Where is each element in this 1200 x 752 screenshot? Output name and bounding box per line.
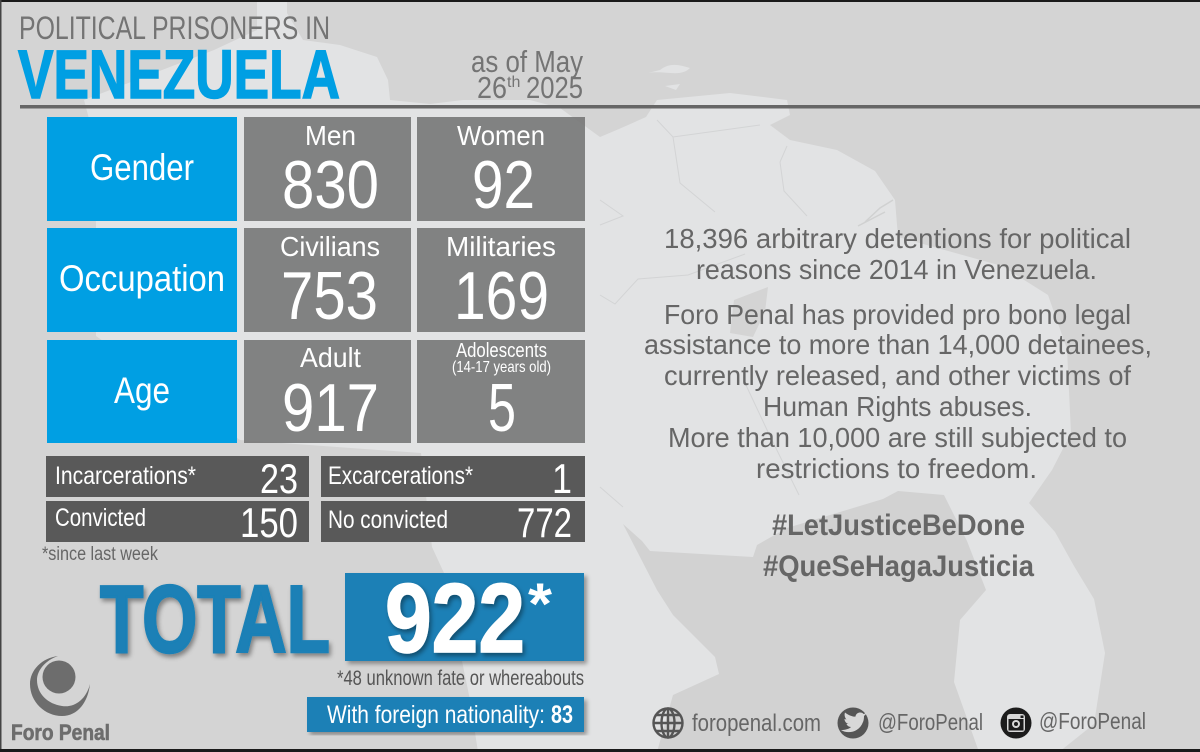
date: 2025 — [526, 70, 583, 105]
total value — [345, 563, 584, 673]
icon: twitter — [838, 708, 868, 738]
stat: no convicted: No convicted — [328, 506, 448, 534]
text block: legal assistance: currently released, and other victims of — [664, 360, 1131, 391]
stat: excarcerations — [321, 455, 585, 502]
hashtags: #QueSeHagaJusticia — [763, 550, 1034, 583]
date: as of May — [471, 44, 583, 79]
logo: Foro Penal — [11, 656, 110, 745]
title — [18, 10, 340, 113]
panel: occupation: Civilians — [280, 231, 380, 262]
footnote: unknown fate: *48 unknown fate or whereabouts — [337, 667, 584, 690]
date — [471, 44, 583, 105]
stat: excarcerations: Excarcerations* — [328, 462, 473, 490]
text block: legal assistance — [644, 299, 1152, 484]
panel: age: Adolescents — [456, 340, 547, 362]
panel: gender: Men — [305, 120, 356, 151]
panel: age: (14-17 years old) — [452, 359, 551, 376]
stat: convicted: Convicted — [55, 504, 146, 532]
panel: gender — [47, 117, 585, 223]
logo: Foro Penal: Foro Penal — [11, 720, 110, 745]
text block: legal assistance: Human Rights abuses. — [763, 391, 1032, 422]
title: POLITICAL PRISONERS IN — [19, 10, 330, 46]
foreign nationality callout: 83 — [551, 701, 573, 729]
stat: no convicted — [321, 499, 585, 546]
text block: legal assistance: restrictions to freedom. — [756, 453, 1037, 484]
panel: occupation: 753 — [281, 258, 378, 334]
icon: instagram — [1000, 708, 1032, 738]
text block: legal assistance: Foro Penal has provided pro bono legal — [664, 299, 1131, 330]
text block: arbitrary detentions: 18,396 arbitrary detentions for political — [664, 223, 1131, 254]
total label: TOTAL — [100, 566, 330, 673]
panel: gender: 92 — [472, 147, 535, 223]
stat: incarcerations: 23 — [260, 455, 298, 502]
stat: convicted: 150 — [240, 499, 298, 546]
stat: no convicted: 772 — [517, 499, 572, 546]
panel: occupation: Militaries — [446, 231, 556, 262]
hashtags — [763, 509, 1034, 583]
panel: occupation: 169 — [454, 258, 549, 334]
panel: gender: Gender — [90, 147, 194, 188]
panel: age: 5 — [488, 370, 516, 446]
panel: gender: Women — [457, 120, 545, 151]
total value: * — [528, 572, 552, 637]
total value: 922 — [385, 563, 525, 673]
text: twitter handle: @ForoPenal — [878, 709, 983, 735]
stat: incarcerations — [46, 455, 309, 502]
date: th — [507, 74, 520, 91]
text: website: foropenal.com — [692, 710, 821, 737]
foreign nationality callout: With foreign nationality: — [327, 701, 545, 729]
title: VENEZUELA — [18, 36, 340, 113]
panel: gender: 830 — [282, 147, 379, 223]
panel: age: Age — [114, 370, 170, 411]
date: 26 — [477, 70, 507, 105]
panel: age: 917 — [282, 370, 379, 446]
icon: globe — [654, 708, 682, 738]
text block: legal assistance: More than 10,000 are still subjected to — [668, 422, 1127, 453]
stat: excarcerations: 1 — [552, 455, 572, 502]
panel: occupation — [47, 228, 585, 334]
panel: occupation: Occupation — [59, 258, 225, 299]
text block: arbitrary detentions: reasons since 2014 in Venezuela. — [696, 254, 1097, 285]
panel: age — [47, 340, 585, 446]
stat: incarcerations: Incarcerations* — [55, 462, 196, 490]
footnote: since last week: *since last week — [42, 544, 158, 565]
text block: legal assistance: assistance to more than 14,000 detainees, — [644, 329, 1152, 360]
text: instagram handle: @ForoPenal — [1039, 708, 1146, 734]
panel: age: Adult — [300, 342, 361, 373]
text block: arbitrary detentions — [664, 223, 1131, 285]
stat: convicted — [46, 499, 309, 546]
hashtags: #LetJusticeBeDone — [772, 509, 1025, 542]
